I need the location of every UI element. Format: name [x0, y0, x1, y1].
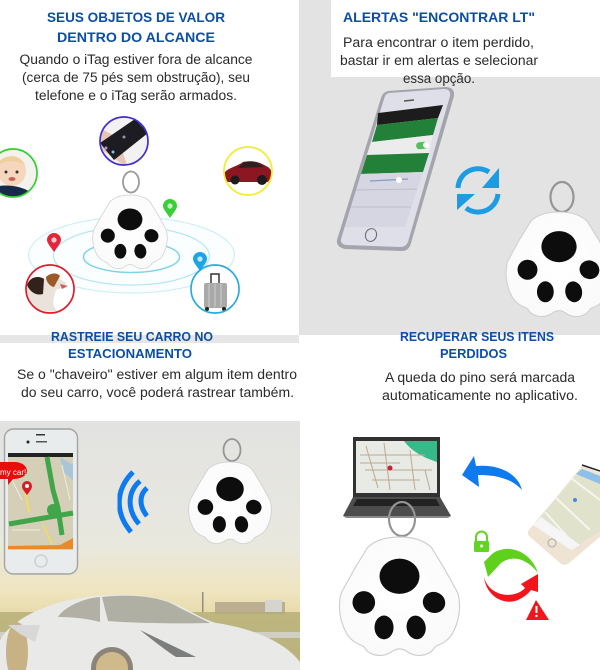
icon: blue curved arrow	[462, 456, 522, 490]
heading: recover	[400, 329, 554, 361]
panel: recover illustration	[339, 437, 600, 655]
heading: alerts: ALERTAS "ENCONTRAR LT"	[343, 9, 535, 25]
callout: my car	[0, 462, 27, 485]
icon: smartphone with map	[0, 429, 78, 574]
text: recover description: automaticamente no aplicativo.	[382, 388, 578, 403]
heading: car tracking	[51, 329, 213, 361]
band under first panel	[0, 335, 299, 343]
icon: paw tag two	[506, 182, 600, 316]
icon: paw tag four	[339, 502, 460, 655]
icon: paw tag one	[93, 172, 167, 269]
text: car tracking description: do seu carro, você poderá rastrear também.	[21, 385, 294, 400]
text: car tracking description	[17, 367, 297, 400]
icon: wifi signal arcs	[119, 472, 147, 532]
icon: green pin	[163, 199, 177, 218]
callout: my car: my car!	[0, 468, 26, 477]
icon: smartphone with map	[528, 465, 600, 565]
text: alerts description: Para encontrar o item perdido,	[343, 35, 534, 50]
heading: car tracking: RASTREIE SEU CARRO NO	[51, 329, 213, 344]
icon: phone circle	[100, 117, 148, 168]
text: range description: Quando o iTag estiver fora de alcance	[20, 52, 252, 67]
icon: car circle	[224, 147, 272, 195]
icon: green and red cycle arrows	[484, 549, 538, 602]
heading: recover: RECUPERAR SEUS ITENS	[400, 329, 554, 344]
icon: laptop with map	[343, 437, 451, 518]
icon: tilted smartphone	[337, 87, 454, 251]
text: range description: telefone e o iTag serão armados.	[35, 88, 237, 103]
background scene	[0, 421, 300, 670]
text: alerts description: bastar ir em alertas e selecionar	[340, 53, 539, 68]
panel: range illustration	[0, 117, 272, 313]
text: recover description: A queda do pino será marcada	[385, 370, 575, 385]
icon: white sports car	[0, 595, 300, 670]
icon: blue pin	[193, 252, 207, 271]
text: alerts description: essa opção.	[403, 71, 475, 86]
icon: green lock	[474, 532, 489, 552]
range rings	[28, 217, 234, 293]
text: range description	[20, 52, 252, 103]
icon: paw tag three	[189, 439, 271, 544]
icon: blue sync arrows	[457, 168, 499, 212]
heading: range: DENTRO DO ALCANCE	[57, 29, 215, 45]
icon: red warning triangle	[526, 600, 549, 620]
heading: range: SEUS OBJETOS DE VALOR	[47, 9, 225, 25]
text: alerts description	[340, 35, 539, 86]
panel: car park illustration	[0, 421, 300, 670]
panel: alert illustration	[337, 87, 600, 316]
icon: suitcase circle	[191, 265, 239, 313]
heading: range	[47, 9, 225, 45]
panel: background top right	[299, 0, 600, 335]
icon: baby circle	[0, 149, 37, 197]
heading: car tracking: ESTACIONAMENTO	[68, 346, 192, 361]
icon: dog circle	[26, 265, 74, 313]
text: car tracking description: Se o "chaveiro" estiver em algum item dentro	[17, 367, 297, 382]
text: recover description	[382, 370, 578, 403]
text: range description: (cerca de 75 pés sem obstrução), seu	[22, 70, 250, 85]
icon: red pin	[47, 233, 61, 252]
map pin	[22, 481, 32, 495]
heading: recover: PERDIDOS	[440, 346, 507, 361]
